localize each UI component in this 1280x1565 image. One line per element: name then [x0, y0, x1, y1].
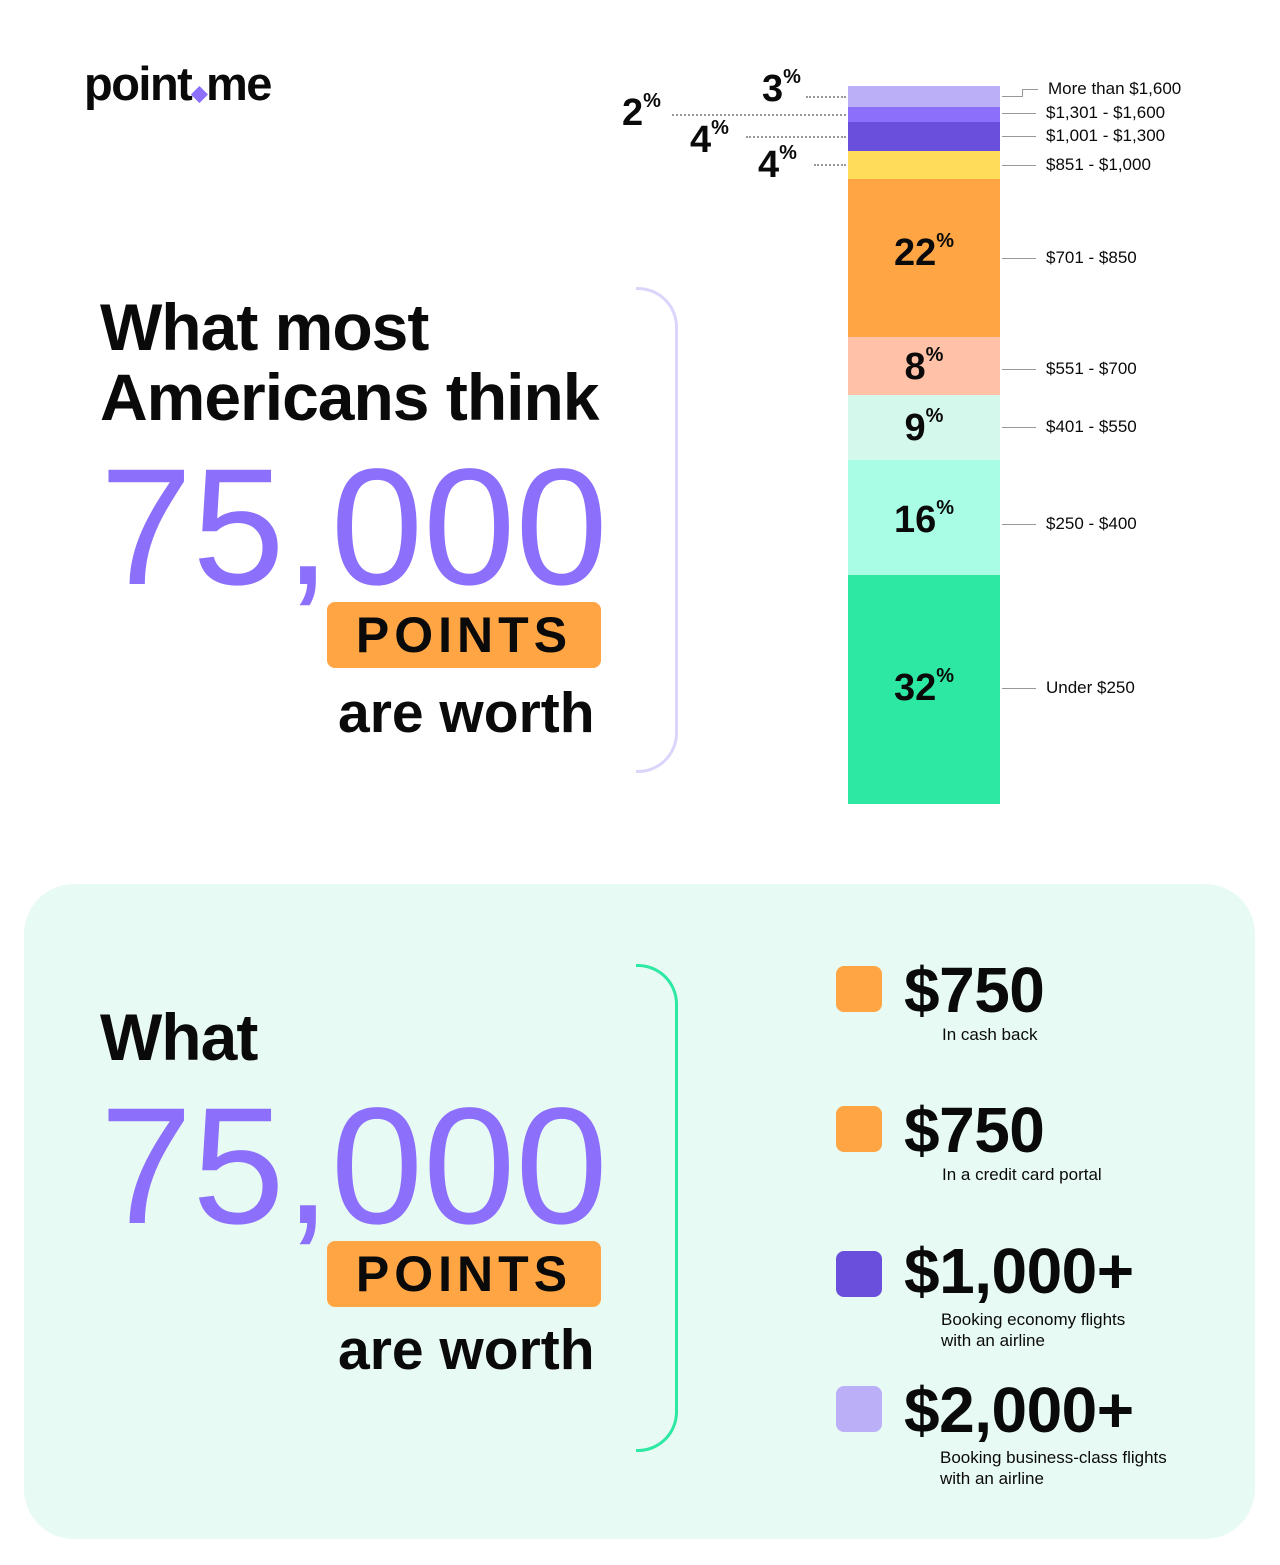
values list: $2,000+ — [904, 1374, 1134, 1446]
bracket 2 — [636, 964, 678, 1452]
big number 1: 75,000 — [100, 435, 608, 620]
heading: what most americans think: Americans think — [100, 360, 598, 434]
stacked bar chart: Under $250 — [1046, 678, 1135, 697]
values list — [836, 954, 1167, 1488]
values list: with an airline — [941, 1331, 1045, 1350]
points badge 1 — [327, 602, 601, 668]
values list: Booking economy flights — [941, 1310, 1125, 1329]
stacked bar chart: $701 - $850 — [1046, 248, 1137, 267]
values list: In cash back — [942, 1025, 1037, 1044]
stacked bar chart: 3% — [762, 66, 801, 110]
stacked bar chart: 9% — [905, 405, 943, 449]
heading: what most americans think: What most — [100, 290, 428, 364]
stacked bar chart — [622, 66, 1181, 804]
stacked bar chart: $1,301 - $1,600 — [1046, 103, 1165, 122]
stacked bar chart: $851 - $1,000 — [1046, 155, 1151, 174]
stacked bar chart: $551 - $700 — [1046, 359, 1137, 378]
stacked bar chart: 8% — [905, 344, 943, 388]
stacked bar chart: 4% — [690, 117, 729, 161]
bracket 1 — [636, 287, 678, 773]
values list: $750 — [904, 954, 1044, 1026]
stacked bar chart: 32% — [894, 665, 954, 709]
stacked bar chart: 4% — [758, 142, 797, 186]
are worth 1: are worth — [338, 681, 595, 745]
points badge 1: POINTS — [356, 607, 572, 663]
are worth 2: are worth — [338, 1318, 595, 1382]
values list: Booking business-class flights — [940, 1448, 1167, 1467]
stacked bar chart: $401 - $550 — [1046, 417, 1137, 436]
stacked bar chart: $250 - $400 — [1046, 514, 1137, 533]
values list: In a credit card portal — [942, 1165, 1102, 1184]
panel: actual value — [24, 884, 1255, 1539]
stacked bar chart: 16% — [894, 497, 954, 541]
values list: $750 — [904, 1094, 1044, 1166]
values list: with an airline — [940, 1469, 1044, 1488]
stacked bar chart: 2% — [622, 90, 661, 134]
values list: $1,000+ — [904, 1235, 1134, 1307]
big number 2: 75,000 — [100, 1074, 608, 1259]
stacked bar chart: More than $1,600 — [1048, 79, 1181, 98]
logo: point◆me — [84, 57, 271, 110]
heading: what most americans think — [100, 290, 600, 434]
heading: what: What — [100, 1000, 257, 1074]
stacked bar chart: 22% — [894, 230, 954, 274]
points badge 2: POINTS — [356, 1246, 572, 1302]
points badge 2 — [327, 1241, 601, 1307]
stacked bar chart: $1,001 - $1,300 — [1046, 126, 1165, 145]
